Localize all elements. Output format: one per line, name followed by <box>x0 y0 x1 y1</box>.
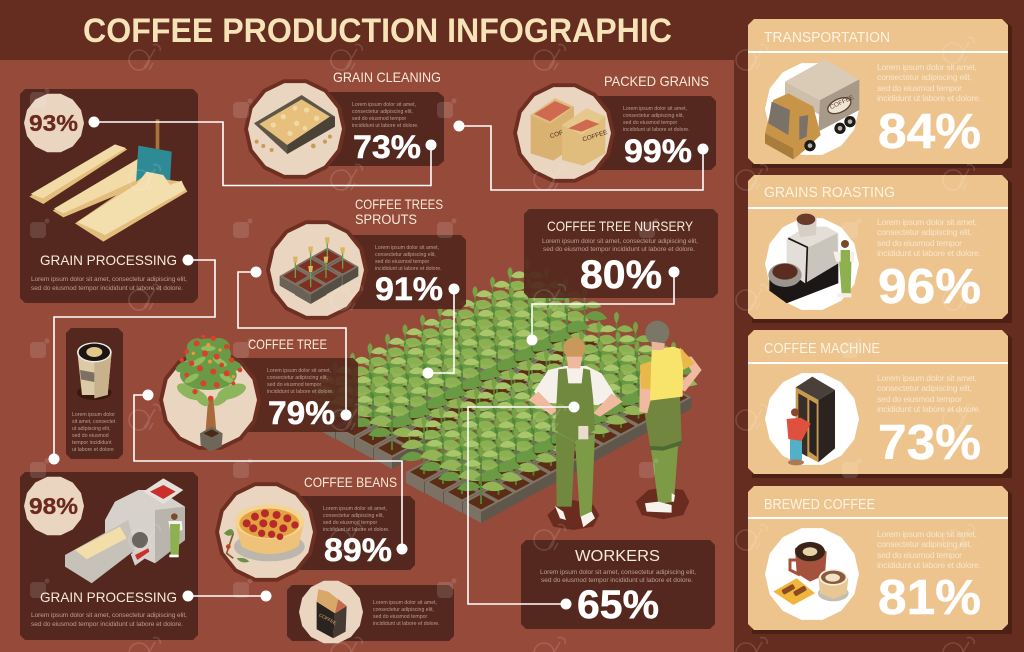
text block: sed do eiusmod tempor <box>323 520 377 526</box>
text block: incididunt ut labore et dolore. <box>623 127 690 133</box>
text block: sed do eiusmod tempor <box>375 259 429 265</box>
text block <box>352 102 419 129</box>
text block: sed do eiusmod tempor <box>623 120 677 126</box>
text block: incididunt ut labore et dolore. <box>877 404 981 414</box>
card: coffee machine <box>748 330 1012 478</box>
text block: sed do eiusmod <box>72 433 109 439</box>
stat: 79%: 79% <box>268 395 335 431</box>
text block: consectetur adipiscing elit, <box>373 607 434 613</box>
worker in green overalls <box>528 337 623 530</box>
heading: COFFEE TREE <box>248 336 327 352</box>
text block: sed do eiusmod tempor <box>373 614 427 620</box>
text block: sed do eiusmod tempor incididunt ut labore et dolore. <box>31 621 183 628</box>
text block <box>373 600 440 627</box>
text block: Lorem ipsum dolor sit amet, <box>877 217 977 227</box>
text block: consectetur adipiscing elit, <box>352 109 413 115</box>
heading: WORKERS <box>575 548 660 565</box>
card: transportation <box>748 19 1012 168</box>
text block: incididunt ut labore et dolore. <box>877 248 981 258</box>
text block: consectetur adipiscing elit, <box>877 227 972 237</box>
connector dots <box>48 116 708 610</box>
icon: truck: COFFEE <box>829 94 855 111</box>
icon: coffee bag: COFFEE <box>318 612 337 626</box>
text block: Lorem ipsum dolor sit amet, <box>877 62 977 72</box>
heading: GRAINS ROASTING <box>764 184 895 201</box>
illustration: two workers <box>528 321 702 530</box>
text block <box>542 238 698 253</box>
stat: 98% badge: 98% <box>29 493 78 519</box>
stat: 80%: 80% <box>580 253 662 297</box>
text block <box>540 569 696 584</box>
stat: 81%: 81% <box>878 571 981 625</box>
heading: grain processing: GRAIN PROCESSING <box>40 252 177 268</box>
panel: cup <box>66 328 123 459</box>
text block: consectetur adipiscing elit, <box>375 252 436 258</box>
text block: incididunt ut labore et dolore. <box>375 266 442 272</box>
text block: tempor incididunt <box>72 440 112 446</box>
text block <box>623 106 690 133</box>
panel: coffee tree <box>159 335 358 452</box>
text block: incididunt ut labore et dolore. <box>267 389 334 395</box>
heading: PACKED GRAINS <box>604 73 709 89</box>
heading: SPROUTS <box>355 211 417 227</box>
text block: Lorem ipsum dolor <box>72 412 115 418</box>
heading: COFFEE MACHINE <box>764 340 880 357</box>
text block: consectetur adipiscing elit, <box>267 375 328 381</box>
panel: coffee tree nursery <box>524 209 718 298</box>
text block: incididunt ut labore et dolore. <box>373 621 440 627</box>
text block: consectetur adipiscing elit, <box>323 513 384 519</box>
text block: consectetur adipiscing elit, <box>877 72 972 82</box>
stat: 73%: 73% <box>353 129 421 165</box>
stat: 89%: 89% <box>324 532 392 568</box>
stat: 96%: 96% <box>878 260 981 314</box>
text block: Lorem ipsum dolor sit amet, consectetur adipiscing elit, <box>542 238 698 245</box>
connector lines <box>54 122 703 604</box>
title: COFFEE PRODUCTION INFOGRAPHIC <box>83 12 672 50</box>
icon: truck <box>765 59 859 159</box>
icon: bowl of beans <box>224 504 305 562</box>
text block: sed do eiusmod tempor <box>877 550 962 560</box>
text block: sed do eiusmod tempor <box>352 116 406 122</box>
text block: consectetur adipiscing elit, <box>877 539 972 549</box>
panel: workers <box>521 540 715 629</box>
heading: TRANSPORTATION <box>764 29 890 46</box>
text block: Lorem ipsum dolor sit amet, <box>352 102 416 108</box>
heading: GRAIN CLEANING <box>333 69 441 85</box>
text block: incididunt ut labore et dolore. <box>323 527 390 533</box>
text block: Lorem ipsum dolor sit amet, <box>877 373 977 383</box>
panel: grain processing top <box>20 89 198 303</box>
panel: grain cleaning <box>244 69 444 179</box>
heading <box>355 196 443 227</box>
text block <box>877 373 981 414</box>
icon: coffee cups <box>773 542 849 605</box>
text block: consectetur adipiscing elit, <box>877 383 972 393</box>
text block <box>877 62 981 103</box>
text block <box>31 612 187 628</box>
icon: coffee sacks: COFFEE <box>582 129 608 144</box>
stat: 99%: 99% <box>624 133 692 169</box>
text block: consectetur adipiscing elit, <box>623 113 684 119</box>
text block: Lorem ipsum dolor sit amet, consectetur adipiscing elit, <box>31 612 187 619</box>
text block: ut adipiscing elit, <box>72 426 110 432</box>
stat: 65%: 65% <box>577 583 659 627</box>
icon: paper cup <box>77 342 112 400</box>
text block <box>72 412 116 453</box>
text block: sed do eiusmod tempor <box>877 83 962 93</box>
stat: 84%: 84% <box>878 105 981 159</box>
text block: Lorem ipsum dolor sit amet, <box>373 600 437 606</box>
text block <box>375 245 442 272</box>
text block: sed do eiusmod tempor <box>877 238 962 248</box>
icon: vending machine <box>787 377 835 465</box>
text block <box>267 368 334 395</box>
panel: coffee bag <box>287 581 454 643</box>
text block: sed do eiusmod tempor incididunt ut labore et dolore. <box>541 577 693 584</box>
text block: Lorem ipsum dolor sit amet, <box>267 368 331 374</box>
text block: Lorem ipsum dolor sit amet, consectetur adipiscing elit, <box>540 569 696 576</box>
text block <box>31 276 187 292</box>
text block: ut labore et dolore <box>72 447 114 453</box>
stat: 98% badge <box>24 477 84 535</box>
text block: sed do eiusmod tempor incididunt ut labore et dolore. <box>543 246 695 253</box>
heading: grain processing: GRAIN PROCESSING <box>40 589 177 605</box>
icon: sprout trays <box>280 237 358 304</box>
text block <box>877 217 981 258</box>
heading: COFFEE BEANS <box>304 474 397 490</box>
panel: coffee beans <box>215 474 415 582</box>
stat: 93% badge <box>24 94 84 152</box>
panel: coffee trees sprouts <box>266 196 466 320</box>
card: grains roasting <box>748 175 1012 323</box>
stat: 91%: 91% <box>375 271 443 307</box>
text block: Lorem ipsum dolor sit amet, <box>323 506 387 512</box>
text block <box>877 529 981 570</box>
text block: Lorem ipsum dolor sit amet, <box>623 106 687 112</box>
panel: packed grains <box>513 73 716 183</box>
icon: tray of grains <box>254 95 335 154</box>
text block: Lorem ipsum dolor sit amet, <box>877 529 977 539</box>
icon: coffee sacks: COF <box>549 129 564 140</box>
icon: coffee bag <box>317 589 347 638</box>
text block: Lorem ipsum dolor sit amet, <box>375 245 439 251</box>
text block: incididunt ut labore et dolore. <box>877 93 981 103</box>
panel: grain processing machine <box>20 472 198 640</box>
text block: sed do eiusmod tempor incididunt ut labore et dolore. <box>31 285 183 292</box>
text block <box>323 506 390 533</box>
stat: 73%: 73% <box>878 416 981 470</box>
heading: COFFEE TREE NURSERY <box>547 218 694 234</box>
text block: incididunt ut labore et dolore. <box>877 560 981 570</box>
icon: coffee sacks <box>531 98 608 166</box>
illustration: coffee plant field <box>311 258 698 523</box>
text block: incididunt ut labore et dolore. <box>352 123 419 129</box>
icon: roaster <box>768 214 854 303</box>
text block: sed do eiusmod tempor <box>267 382 321 388</box>
heading: COFFEE TREES <box>355 196 443 212</box>
text block: Lorem ipsum dolor sit amet, consectetur adipiscing elit, <box>31 276 187 283</box>
icon: coffee tree <box>174 335 248 452</box>
worker in yellow shirt <box>636 321 702 519</box>
text block: sit amet, consectet <box>72 419 116 425</box>
heading: BREWED COFFEE <box>764 496 875 513</box>
card: brewed coffee <box>748 486 1012 634</box>
illustration: processing machine <box>65 478 185 583</box>
illustration: grain trays <box>29 119 187 242</box>
stat: 93% badge: 93% <box>29 110 78 136</box>
text block: sed do eiusmod tempor <box>877 394 962 404</box>
